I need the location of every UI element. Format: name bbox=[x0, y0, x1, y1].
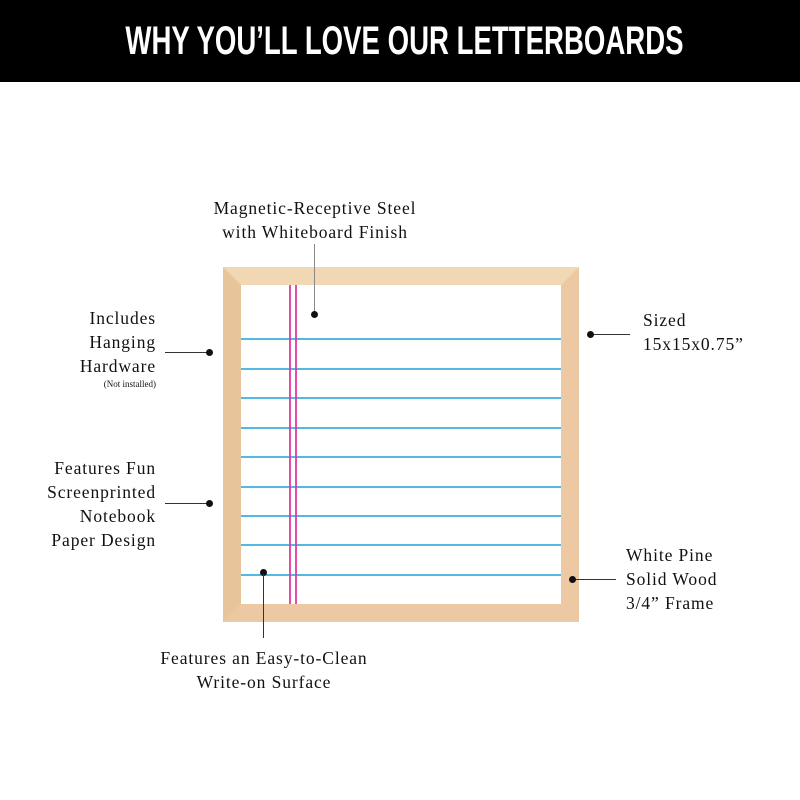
callout: hanging hardware: (Not installed) bbox=[104, 379, 156, 389]
callout: frame bbox=[626, 545, 717, 613]
callout: write-on surface: Write-on Surface bbox=[197, 672, 331, 692]
callout: notebook paper: Screenprinted bbox=[47, 482, 156, 502]
callout: write-on surface: Features an Easy-to-Clean bbox=[160, 648, 368, 668]
callout: notebook paper: Paper Design bbox=[51, 530, 156, 550]
callout: size bbox=[643, 310, 744, 354]
callout: hanging hardware: Hardware bbox=[80, 356, 156, 376]
title bar bbox=[0, 0, 800, 82]
callout: write-on surface bbox=[160, 648, 368, 692]
callout: hanging hardware bbox=[80, 308, 156, 389]
callout: magnetic steel: Magnetic-Receptive Steel bbox=[214, 198, 416, 218]
callout: notebook paper bbox=[47, 458, 156, 550]
callout: magnetic steel bbox=[214, 198, 416, 242]
callout: frame: White Pine bbox=[626, 545, 713, 565]
callout: notebook paper: Features Fun bbox=[54, 458, 156, 478]
callout: magnetic steel: with Whiteboard Finish bbox=[222, 222, 408, 242]
callout: frame: 3/4” Frame bbox=[626, 593, 714, 613]
callout: size: Sized bbox=[643, 310, 686, 330]
callout: frame: Solid Wood bbox=[626, 569, 717, 589]
callout: notebook paper: Notebook bbox=[80, 506, 156, 526]
title bar: WHY YOU’LL LOVE OUR LETTERBOARDS bbox=[125, 19, 684, 63]
letterboard bbox=[223, 267, 579, 622]
callout: hanging hardware: Includes bbox=[90, 308, 156, 328]
callout: hanging hardware: Hanging bbox=[89, 332, 156, 352]
callout: size: 15x15x0.75” bbox=[643, 334, 744, 354]
